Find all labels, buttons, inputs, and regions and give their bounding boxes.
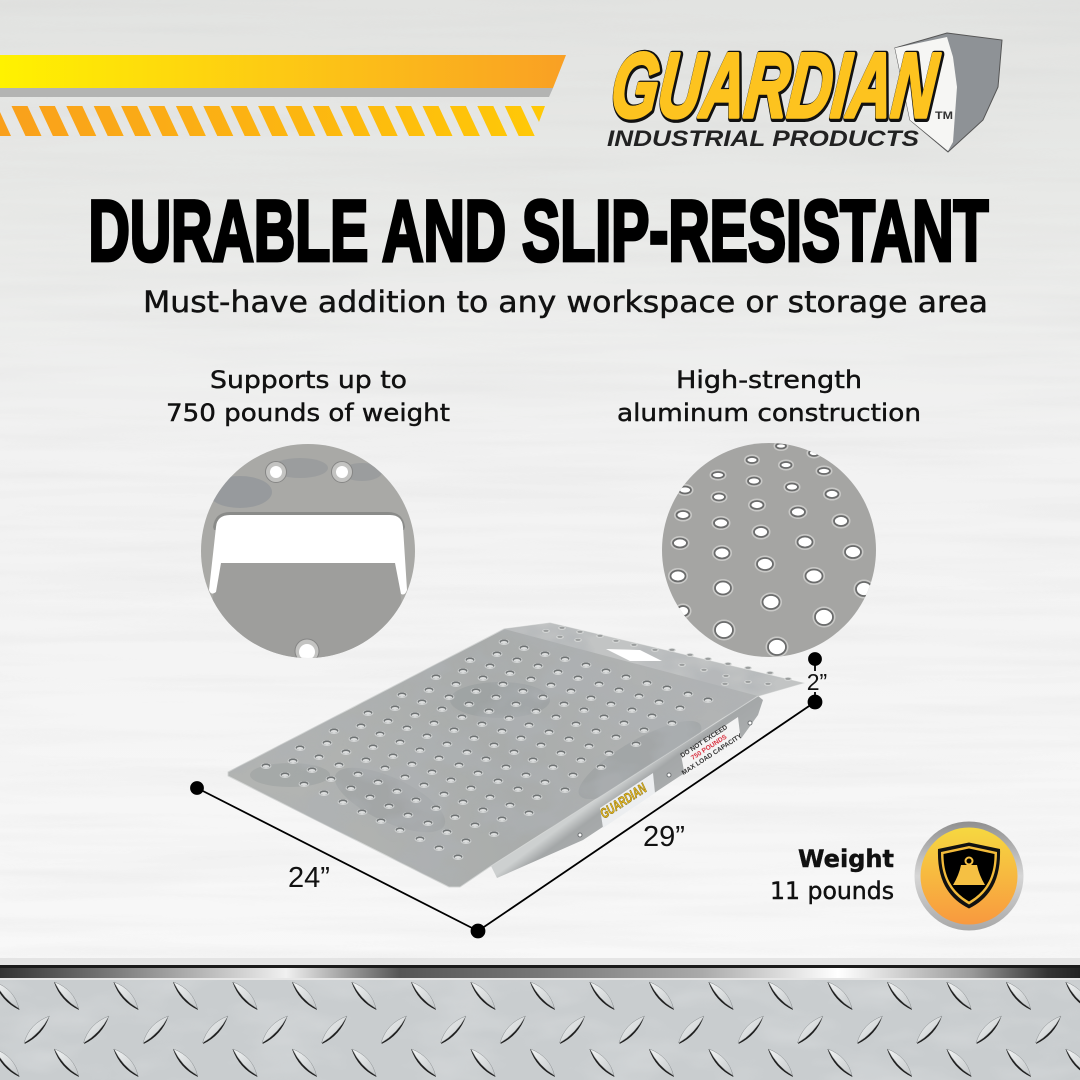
yellow orange bar (0, 55, 566, 88)
feature label: aluminum (617, 366, 921, 427)
feature label: weight capacity: Supports up to (210, 366, 407, 394)
load capacity side label: 750 POUNDS (690, 733, 729, 762)
hazard stripes (0, 106, 545, 136)
Guardian side label: GUARDIAN (597, 779, 650, 822)
dimension: 2 inches: 2” (807, 669, 827, 695)
dimension: 24 inches: 24” (288, 862, 330, 894)
slot opening (209, 515, 407, 594)
ramp apron (504, 623, 803, 696)
icon: weight badge (914, 822, 1024, 930)
slot holes (266, 462, 352, 663)
plate mottling (228, 627, 764, 887)
weight label: 11 pounds (770, 877, 894, 905)
product photo: shoring ramp (228, 620, 808, 890)
circle detail: traction holes (660, 442, 878, 660)
circle detail: handle slot (200, 443, 416, 663)
Guardian side label (597, 773, 655, 828)
ramp side face (491, 695, 763, 878)
traction holes (261, 639, 713, 860)
grey bar (0, 88, 553, 97)
weight label: Weight (798, 845, 894, 873)
header stripes (0, 55, 566, 136)
plate blotches (250, 682, 702, 825)
load capacity side label: DO NOT EXCEED (679, 724, 729, 760)
trademark: TM (935, 110, 953, 122)
shield (938, 842, 1000, 908)
kettlebell weight (953, 858, 985, 885)
ramp top plate (228, 623, 803, 887)
subtitle: Must-have addition to any workspace or storage area (143, 285, 988, 319)
logo: Guardian Industrial Products (607, 33, 1002, 152)
feature label: weight capacity: 750 pounds of weight (166, 399, 450, 427)
handle slot (606, 649, 662, 661)
feature label: aluminum: aluminum construction (617, 399, 921, 427)
feature label: aluminum: High-strength (676, 366, 862, 394)
logo shield (895, 33, 1002, 152)
apron holes (542, 626, 792, 686)
dimension lines (191, 653, 822, 938)
diamond tread plate (0, 980, 1080, 1080)
load capacity side label: MAX LOAD CAPACITY (681, 732, 744, 777)
feature label: weight capacity (166, 366, 450, 427)
floor rail (0, 958, 1080, 980)
side holes (578, 721, 752, 837)
logo tagline: INDUSTRIAL PRODUCTS (607, 126, 919, 151)
weight label (770, 845, 894, 905)
dimension: 29 inches: 29” (643, 821, 685, 853)
